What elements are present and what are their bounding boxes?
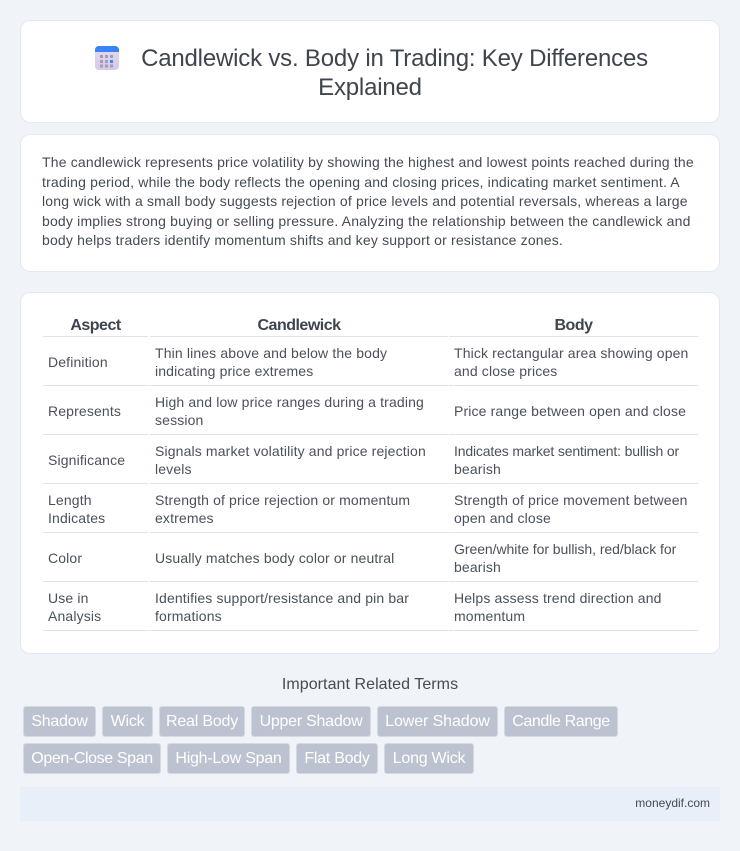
row: represents: session bbox=[155, 412, 203, 428]
row: definition: Definition bbox=[48, 354, 108, 370]
row: color bbox=[48, 541, 676, 575]
footer source: moneydif.com bbox=[635, 796, 710, 810]
row: color: Usually matches body color or neutral bbox=[155, 550, 394, 566]
tag: Open-Close Span: Open-Close Span bbox=[31, 750, 153, 767]
title bbox=[141, 45, 648, 101]
row: use in analysis bbox=[48, 590, 662, 624]
row: definition: Thin lines above and below the body bbox=[155, 345, 387, 361]
row: length indicates: open and close bbox=[454, 510, 551, 526]
tag: High-Low Span bbox=[167, 743, 290, 774]
related terms heading: Important Related Terms bbox=[282, 676, 458, 693]
intro text: The candlewick represents price volatility by showing the highest and lowest points reached during the bbox=[42, 154, 694, 170]
row: definition: and close prices bbox=[454, 363, 557, 379]
intro text bbox=[42, 154, 694, 248]
row: definition: indicating price extremes bbox=[155, 363, 313, 379]
row: use in analysis: Use in bbox=[48, 590, 89, 606]
title: Candlewick vs. Body in Trading: Key Differences bbox=[141, 45, 648, 72]
tag: Shadow: Shadow bbox=[31, 713, 88, 730]
header card bbox=[20, 20, 720, 123]
row: represents: Price range between open and close bbox=[454, 403, 686, 419]
tag: Real Body: Real Body bbox=[166, 713, 238, 730]
row: length indicates: Strength of price movement between bbox=[454, 492, 688, 508]
tag: Long Wick bbox=[384, 743, 474, 774]
row: represents: Represents bbox=[48, 403, 121, 419]
row: length indicates: Indicates bbox=[48, 510, 105, 526]
row: significance: Significance bbox=[48, 452, 125, 468]
row: length indicates bbox=[48, 492, 688, 526]
comparison table bbox=[43, 317, 698, 631]
column headers bbox=[70, 317, 593, 334]
icon: calendar bbox=[95, 46, 119, 70]
row: significance: Signals market volatility and price rejection bbox=[155, 443, 426, 459]
row: significance bbox=[48, 443, 679, 477]
tag: Real Body bbox=[159, 706, 245, 737]
tag: Candle Range bbox=[504, 706, 618, 737]
tag: Flat Body: Flat Body bbox=[304, 750, 370, 767]
tag: Candle Range: Candle Range bbox=[512, 713, 610, 730]
tag: Upper Shadow bbox=[251, 706, 371, 737]
row: significance: bearish bbox=[454, 461, 501, 477]
row: significance: Indicates market sentiment: bullish or bbox=[454, 443, 679, 459]
tag: Flat Body bbox=[296, 743, 378, 774]
title: Explained bbox=[318, 74, 422, 101]
intro text: trading period, while the body reflects the opening and closing prices, indicating market sentiment. A bbox=[42, 174, 680, 190]
tag: Wick: Wick bbox=[111, 713, 144, 730]
row: represents bbox=[48, 394, 686, 428]
row: length indicates: Strength of price rejection or momentum bbox=[155, 492, 410, 508]
row: use in analysis: formations bbox=[155, 608, 222, 624]
intro text: body implies strong buying or selling pressure. Analyzing the relationship between the candlewick and bbox=[42, 212, 691, 228]
row: length indicates: Length bbox=[48, 492, 92, 508]
column headers: Aspect bbox=[70, 317, 121, 334]
tag: Lower Shadow: Lower Shadow bbox=[385, 713, 490, 730]
row: definition: Thick rectangular area showing open bbox=[454, 345, 688, 361]
tag: Shadow bbox=[23, 706, 96, 737]
tag: Lower Shadow bbox=[377, 706, 498, 737]
row: use in analysis: Identifies support/resistance and pin bar bbox=[155, 590, 409, 606]
row: significance: levels bbox=[155, 461, 192, 477]
row: color: Green/white for bullish, red/black for bbox=[454, 541, 676, 557]
column headers: Candlewick bbox=[257, 317, 341, 334]
row: length indicates: extremes bbox=[155, 510, 214, 526]
intro text: body helps traders identify momentum shifts and key support or resistance zones. bbox=[42, 232, 563, 248]
tag: High-Low Span: High-Low Span bbox=[175, 750, 282, 767]
tag: Open-Close Span bbox=[23, 743, 161, 774]
tag: Upper Shadow: Upper Shadow bbox=[260, 713, 362, 730]
footer bar bbox=[20, 787, 720, 821]
row: use in analysis: Helps assess trend direction and bbox=[454, 590, 662, 606]
tag: Long Wick: Long Wick bbox=[393, 750, 465, 767]
row: definition bbox=[48, 345, 688, 379]
row: use in analysis: Analysis bbox=[48, 608, 101, 624]
intro text: long wick with a small body suggests rejection of price levels and potential reversals, whereas a large bbox=[42, 193, 688, 209]
table panel bbox=[20, 292, 720, 654]
tag: Wick bbox=[102, 706, 153, 737]
intro panel bbox=[20, 134, 720, 272]
row: color: bearish bbox=[454, 559, 501, 575]
row: use in analysis: momentum bbox=[454, 608, 525, 624]
column headers: Body bbox=[554, 317, 592, 334]
row: represents: High and low price ranges during a trading bbox=[155, 394, 424, 410]
tag list bbox=[23, 706, 618, 774]
row: color: Color bbox=[48, 550, 82, 566]
